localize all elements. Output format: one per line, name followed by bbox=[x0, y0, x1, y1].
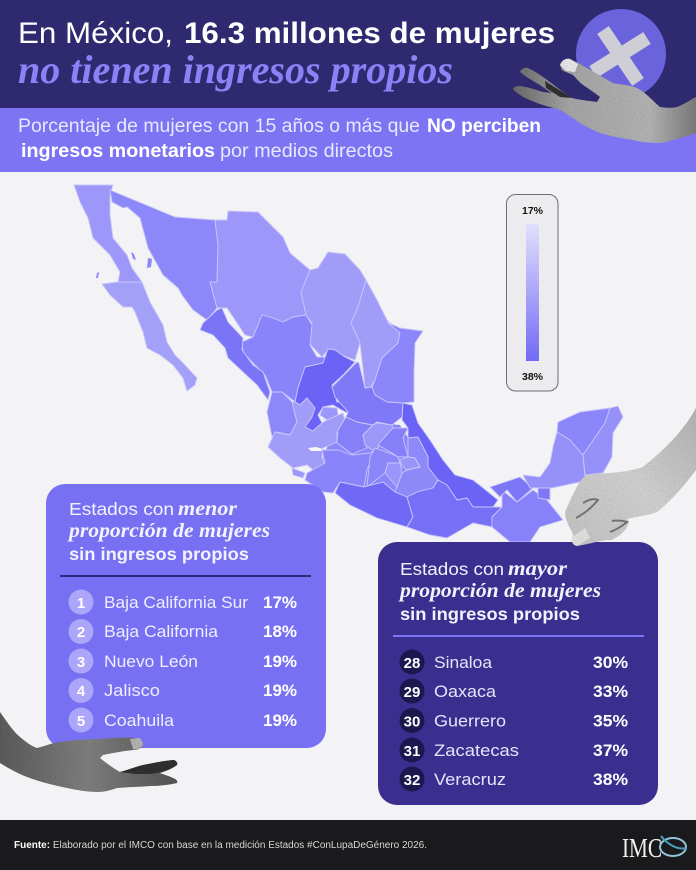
icon: top hand bbox=[513, 59, 696, 143]
panel heading bbox=[398, 558, 601, 624]
state: Campeche bbox=[523, 432, 585, 488]
legend bbox=[506, 194, 558, 391]
row: Baja California: 18% bbox=[263, 622, 297, 641]
title: 16.3 millones de mujeres bbox=[184, 17, 555, 50]
state: Baja California bbox=[74, 185, 142, 282]
icon: circle with X bbox=[576, 9, 666, 99]
state: Sinaloa bbox=[200, 308, 270, 400]
row: Sinaloa bbox=[400, 650, 628, 674]
row: Zacatecas: 31 bbox=[404, 743, 420, 760]
row: Baja California: 2 bbox=[77, 624, 85, 641]
state: Chiapas bbox=[492, 490, 563, 542]
row: Oaxaca: 29 bbox=[404, 684, 420, 701]
state: Zacatecas bbox=[295, 349, 355, 431]
row: Coahuila: 19% bbox=[263, 711, 297, 730]
state: Aguascalientes bbox=[320, 407, 338, 420]
row: Nuevo León: Nuevo León bbox=[104, 652, 198, 671]
legend gradient bar bbox=[526, 224, 539, 361]
row: Coahuila: 5 bbox=[77, 713, 85, 730]
row: Sinaloa: 28 bbox=[404, 655, 420, 672]
state: Nuevo León bbox=[351, 280, 400, 388]
row: Nuevo León: 3 bbox=[77, 654, 85, 671]
logo: IMCO: IMC bbox=[622, 833, 662, 863]
panel heading: sin ingresos propios bbox=[400, 604, 580, 624]
row: Veracruz bbox=[400, 766, 628, 792]
row: Coahuila: Coahuila bbox=[104, 711, 175, 730]
subtitle band bbox=[0, 108, 696, 172]
source note: Fuente: Elaborado por el IMCO con base en la medición Estados #ConLupaDeGénero 2026. bbox=[14, 840, 427, 851]
state: San Luis Potosí bbox=[332, 362, 403, 425]
row: Baja California Sur: 17% bbox=[263, 593, 297, 612]
row: Oaxaca: 33% bbox=[593, 682, 628, 701]
panel heading: proporción de mujeres bbox=[67, 520, 270, 542]
row: Coahuila bbox=[68, 708, 297, 732]
subtitle text: por medios directos bbox=[220, 141, 393, 162]
header band bbox=[0, 0, 696, 108]
row: Jalisco: 4 bbox=[77, 683, 86, 700]
row: Baja California Sur bbox=[68, 590, 297, 614]
row: Guerrero: 35% bbox=[593, 712, 628, 730]
row: Sinaloa: Sinaloa bbox=[434, 653, 493, 672]
footer bbox=[0, 820, 696, 870]
state: Yucatán bbox=[557, 408, 610, 455]
state: Chihuahua bbox=[210, 211, 310, 337]
row: Zacatecas: 37% bbox=[593, 741, 628, 760]
subtitle text: Porcentaje de mujeres con 15 años o más que bbox=[18, 116, 420, 137]
icon: right hand bbox=[565, 408, 696, 546]
row: Baja California Sur: Baja California Sur bbox=[104, 593, 248, 612]
panel heading: mayor bbox=[508, 558, 567, 580]
subtitle text bbox=[18, 116, 541, 162]
map of Mexico bbox=[74, 185, 623, 542]
state: Guanajuato bbox=[337, 417, 373, 454]
state: Tlaxcala bbox=[400, 457, 420, 470]
panel heading: proporción de mujeres bbox=[398, 580, 601, 602]
row: Nuevo León: 19% bbox=[263, 652, 297, 671]
state: Quintana Roo bbox=[583, 406, 623, 475]
state: Oaxaca bbox=[407, 480, 502, 538]
state: Durango bbox=[242, 315, 327, 402]
legend max: 17% bbox=[522, 205, 544, 217]
row: Guerrero bbox=[400, 708, 628, 733]
state: Puebla bbox=[395, 437, 438, 497]
subtitle text: NO perciben bbox=[427, 116, 541, 137]
row: Baja California bbox=[68, 619, 297, 644]
panel: highest states bbox=[378, 542, 658, 805]
row: Jalisco bbox=[68, 678, 297, 703]
state: Veracruz bbox=[402, 403, 498, 507]
state: Tamaulipas bbox=[372, 322, 423, 403]
row: Baja California: Baja California bbox=[104, 622, 219, 641]
state: Sonora bbox=[110, 190, 218, 320]
state: Nayarit bbox=[267, 392, 297, 437]
panel heading: Estados con bbox=[69, 499, 174, 519]
panel heading bbox=[67, 498, 270, 564]
title: no tienen ingresos propios bbox=[18, 47, 453, 92]
row: Guerrero: 30 bbox=[404, 714, 420, 730]
panel: lowest states bbox=[46, 484, 326, 748]
row: Zacatecas bbox=[400, 738, 628, 762]
title bbox=[18, 17, 555, 92]
row: Oaxaca bbox=[400, 678, 628, 704]
row: Sinaloa: 30% bbox=[593, 653, 628, 672]
row: Guerrero: Guerrero bbox=[434, 712, 506, 730]
state: Estado de México bbox=[367, 448, 400, 487]
islands bbox=[96, 252, 152, 278]
row: Jalisco: 19% bbox=[263, 681, 297, 700]
row: Veracruz: 38% bbox=[593, 770, 628, 789]
icon: lower-left hand bbox=[0, 712, 177, 792]
panel heading: Estados con bbox=[400, 559, 504, 579]
state: Tabasco bbox=[490, 477, 550, 502]
legend min: 38% bbox=[522, 371, 544, 383]
row: Jalisco: Jalisco bbox=[104, 681, 160, 700]
state: Guerrero bbox=[335, 482, 413, 527]
row: Veracruz: 32 bbox=[404, 772, 420, 789]
state: Colima bbox=[292, 468, 305, 478]
row: Nuevo León bbox=[68, 648, 297, 674]
row: Zacatecas: Zacatecas bbox=[434, 741, 519, 760]
row: Oaxaca: Oaxaca bbox=[434, 682, 497, 701]
subtitle text: ingresos monetarios bbox=[21, 141, 215, 162]
state: Coahuila bbox=[301, 252, 366, 360]
map base fill bbox=[320, 420, 470, 530]
title: En México, bbox=[18, 17, 173, 50]
state: Jalisco bbox=[268, 398, 345, 473]
row: Baja California Sur: 1 bbox=[77, 595, 85, 612]
state: Querétaro bbox=[363, 423, 393, 450]
state: Michoacán bbox=[305, 450, 375, 493]
panel heading: menor bbox=[178, 498, 237, 520]
state: Morelos bbox=[385, 463, 402, 487]
panel heading: sin ingresos propios bbox=[69, 544, 249, 564]
row: Veracruz: Veracruz bbox=[434, 770, 506, 789]
state: Hidalgo bbox=[378, 428, 408, 457]
state: Baja California Sur bbox=[102, 282, 197, 391]
state: Lago de Chapala bbox=[308, 447, 323, 451]
